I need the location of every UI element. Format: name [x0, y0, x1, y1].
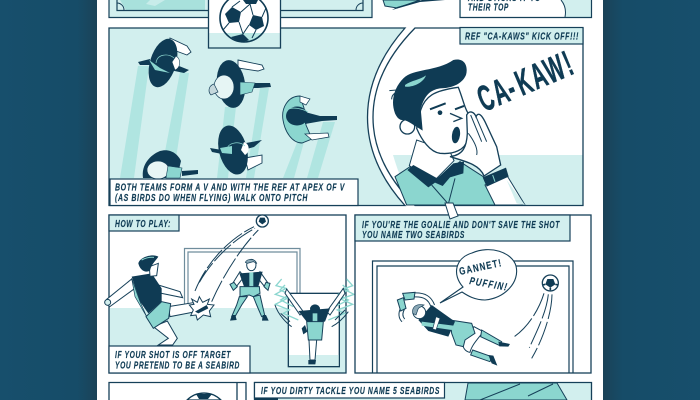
shadows of players [120, 66, 335, 178]
player top view 2 [209, 58, 271, 110]
caption: goalie: YOU NAME TWO SEABIRDS [362, 230, 465, 241]
collar [407, 162, 464, 187]
kicker [105, 255, 214, 345]
icon: ref whistle overlapping panels [445, 203, 458, 219]
panel: both teams form a V [109, 28, 405, 206]
caption: off target: YOU PRETEND TO BE A SEABIRD [115, 360, 240, 372]
icon: card held up [383, 0, 445, 10]
caption: ref ca-kaws: REF "CA-KAWS" KICK OFF!!! [465, 32, 579, 42]
caption: how to play: HOW TO PLAY: [115, 219, 171, 230]
caption: ref ca-kaws [460, 28, 583, 44]
speech bubble [440, 250, 517, 303]
diving goalkeeper [397, 292, 510, 366]
speech bubble: PUFFIN! [469, 275, 509, 293]
goal frame [184, 248, 300, 308]
caption: how to play [109, 215, 179, 231]
referee portrait [389, 60, 525, 205]
panel: how to play [105, 215, 354, 373]
watch [483, 168, 509, 187]
sound effect: ca-kaw: CA-KAW! [472, 45, 579, 120]
arms up [285, 288, 345, 315]
caption: off target: IF YOUR SHOT IS OFF TARGET [115, 350, 231, 361]
caption: goalie: IF YOU'RE THE GOALIE AND DON'T SAVE THE SHOT [362, 220, 560, 231]
forearm [485, 175, 525, 205]
caption: their top [467, 0, 541, 14]
caption: both teams: (AS BIRDS DO WHEN FLYING) WALK ONTO PITCH [115, 193, 308, 204]
panel: top left pitch [109, 0, 372, 18]
ear [400, 119, 415, 134]
goal frame [372, 261, 573, 373]
player top view 1 [138, 35, 191, 91]
player top view 4 [143, 150, 198, 179]
speech bubble: GANNET! [458, 257, 503, 277]
mouth [451, 126, 461, 144]
panel: bottom left [109, 382, 246, 400]
icon: ball [256, 215, 268, 227]
whistle cord [432, 178, 455, 204]
caption: dirty tackle [254, 382, 444, 398]
ball flight lines [513, 293, 552, 358]
cupped hand [450, 112, 501, 176]
panel: dirty tackle [254, 382, 592, 400]
eyes and brows [438, 110, 442, 115]
shirt [395, 162, 495, 205]
caption: both teams [110, 179, 358, 206]
inset: pretending to be a seabird [275, 279, 354, 367]
caption: dirty tackle: IF YOU DIRTY TACKLE YOU NAME 5 SEABIRDS [261, 386, 440, 397]
player top view 3 [210, 122, 262, 178]
wings [275, 279, 354, 320]
tackling player torso [465, 383, 567, 400]
panel: goalie names seabirds [355, 215, 591, 373]
neck [409, 140, 454, 182]
panel: ref calls kick off [373, 28, 583, 206]
caption: goalie [355, 215, 570, 241]
referee top view [283, 96, 337, 143]
face [417, 87, 469, 154]
center ball box [208, 0, 280, 48]
hair [393, 60, 467, 131]
standing goalkeeper [230, 259, 270, 321]
ball flight lines [195, 227, 258, 302]
paper sheet [97, 0, 603, 400]
icon: football [220, 0, 268, 42]
caption: their top: THEIR TOP [468, 2, 509, 14]
icon: ball top [187, 393, 221, 400]
caption: off target [109, 346, 250, 373]
kick impact burst [189, 297, 214, 320]
icon: ball [542, 275, 558, 291]
arms overhead [401, 295, 433, 320]
caption: both teams: BOTH TEAMS FORM A V AND WITH THE REF AT APEX OF V [115, 182, 345, 194]
panel: top right [460, 0, 592, 18]
